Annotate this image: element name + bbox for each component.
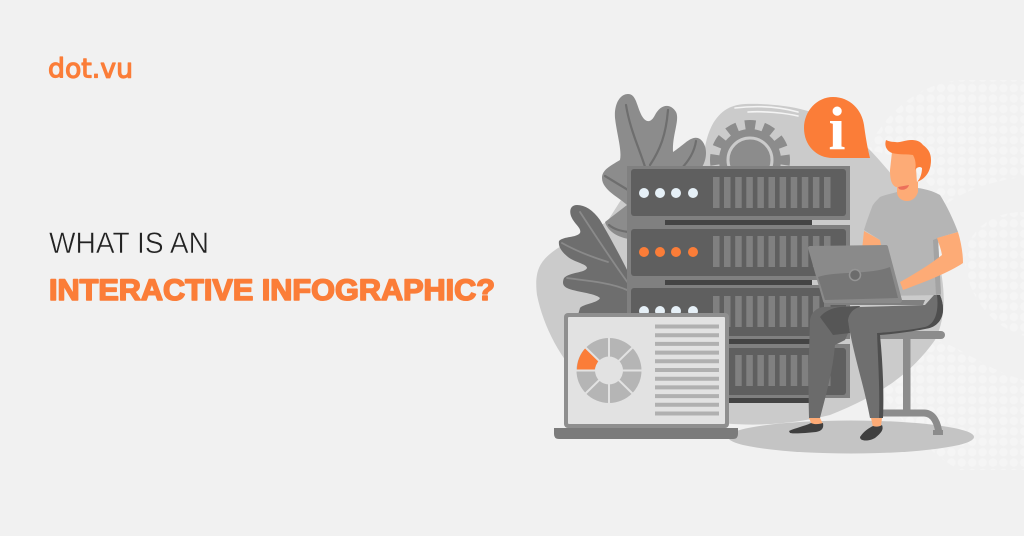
leaf veins <box>605 105 696 232</box>
server rack <box>627 166 850 403</box>
far leg <box>809 306 860 418</box>
server unit 2 <box>627 225 850 280</box>
monitor base <box>554 428 738 439</box>
gear icon <box>715 125 785 195</box>
laptop <box>808 245 925 305</box>
t-shirt side shade <box>933 238 941 295</box>
upper leaf <box>602 94 706 240</box>
stool <box>877 331 945 435</box>
far arm <box>862 231 883 250</box>
right shoe <box>860 425 883 440</box>
t-shirt <box>864 188 958 296</box>
near leg dark edge <box>877 295 943 418</box>
rack shelf 2 <box>665 280 812 285</box>
hair <box>885 140 931 182</box>
neck <box>897 182 918 201</box>
title line 2: INTERACTIVE INFOGRAPHIC? <box>49 274 495 307</box>
server unit 4 <box>627 344 850 398</box>
illustration background blob <box>536 104 944 425</box>
lower leaf <box>559 205 650 325</box>
lower leaf veins <box>562 212 628 290</box>
title line 1: WHAT IS AN <box>49 227 209 260</box>
monitor panel <box>554 313 738 439</box>
left shoe <box>789 423 823 433</box>
laptop base strip <box>823 300 925 305</box>
server unit 3 <box>627 285 850 339</box>
highlight strokes on blob <box>735 107 798 116</box>
between-legs shadow <box>820 306 860 335</box>
near leg <box>848 295 943 418</box>
monitor text lines <box>655 324 719 416</box>
near arm <box>900 232 963 290</box>
ankles <box>809 418 882 427</box>
neck shadow <box>898 185 909 190</box>
donut chart <box>574 336 644 405</box>
rack shelf 3 <box>665 339 812 344</box>
face <box>890 152 917 187</box>
info speech bubble icon: i <box>829 96 846 163</box>
info speech bubble icon <box>804 96 870 163</box>
laptop logo <box>850 270 860 280</box>
rack shelf 1 <box>665 220 812 225</box>
ground shadow <box>728 420 974 454</box>
logo: dot.vu <box>48 54 133 84</box>
rack shelf 4 <box>665 398 812 403</box>
person <box>789 140 963 440</box>
server unit 1 <box>627 166 850 220</box>
dotted background shapes <box>868 80 1024 470</box>
